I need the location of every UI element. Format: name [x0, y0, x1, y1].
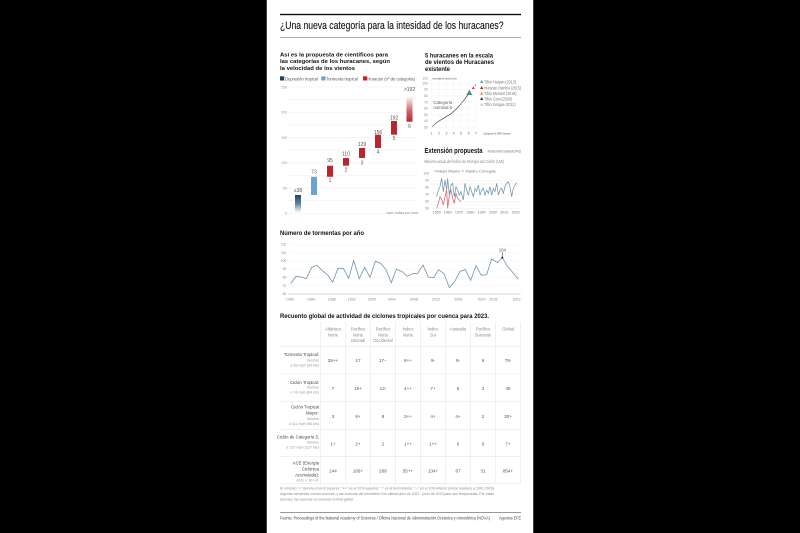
row labels: Ciclónica: [302, 466, 320, 472]
LMI line chart: Mejor Rastro: [437, 168, 461, 173]
table values: [328, 358, 513, 474]
table values: 0: [482, 442, 485, 446]
LMI line chart: [423, 168, 520, 214]
bar value labels: 6: [408, 124, 411, 130]
row labels: Vientos: [307, 417, 319, 421]
table values: 7+: [505, 442, 511, 446]
table values: 854+: [503, 468, 513, 474]
LMI line chart: 50: [425, 206, 429, 210]
scatter chart: 30: [424, 125, 428, 129]
table values: 3: [482, 386, 485, 391]
storms line chart: 100: [281, 259, 286, 263]
scatter chart: 4: [453, 131, 456, 136]
legend: Tormenta tropical: [326, 76, 358, 82]
scatter chart: Categoría: [433, 100, 453, 105]
scatter chart: 90: [424, 88, 428, 92]
scatter chart: 7: [475, 131, 478, 136]
table values: 3++: [404, 414, 412, 419]
scatter chart: 60: [424, 107, 428, 111]
table values: 4++: [404, 386, 412, 391]
row labels: Vientos: [307, 386, 319, 390]
footnote: [280, 486, 495, 502]
title: ¿Una nueva categoría para la intesidad de los huracanes?: [280, 20, 504, 32]
table values: 1+: [330, 442, 336, 446]
bars: [295, 96, 412, 212]
table values: 2+: [355, 442, 361, 446]
storms line chart: 70: [283, 284, 286, 288]
LMI line chart: 1970: [455, 210, 463, 214]
heading: proposed extension: Extensión propuesta: [424, 146, 483, 155]
basin note: Pacífico Norte Occidental (1PNC): [488, 150, 521, 154]
scatter chart: 2: [438, 131, 441, 136]
footnote: Algunas tormentas cruzan cuencas, y las cuencas del hemisferio Sur utilizan julio de 2022 - junio de 2023 para sus temporadas. Por estas: [280, 491, 494, 496]
row labels: ≥ 39 mph (34 kts): [290, 363, 319, 367]
column headers: Atlántico: [325, 326, 342, 332]
bar value labels: 95: [327, 158, 333, 164]
bar value labels: 3: [361, 160, 364, 166]
bar value labels: 73: [311, 170, 317, 176]
table values: 166+: [353, 468, 363, 474]
row labels: Vientos: [307, 440, 319, 444]
legend: [280, 76, 415, 82]
table values: 28++: [328, 358, 339, 363]
storms line chart: 1980: [286, 297, 294, 301]
scatter chart: 5: [460, 131, 463, 136]
table values: 7: [332, 386, 335, 391]
table values: 31: [480, 468, 486, 474]
column headers: Suroeste: [475, 332, 492, 337]
table values: 17: [355, 358, 361, 363]
scatter chart: nominal 5: [433, 105, 453, 110]
storms line chart: 1984: [307, 297, 315, 301]
column headers: Norte: [328, 332, 339, 337]
storms line chart: 2008: [454, 297, 462, 301]
legend: Depresión tropical: [285, 76, 318, 82]
LMI line chart: 1990: [478, 210, 486, 214]
hurricane legend: Tifón Haiyan (2013): [484, 79, 516, 84]
scatter chart: 50: [424, 113, 428, 117]
storms line chart: 1988: [328, 297, 336, 301]
storms line chart: 2000: [368, 297, 376, 301]
hurricane legend: Tifón Surigae (2021): [484, 102, 516, 107]
column headers: Occidental: [373, 338, 393, 343]
table values: 55++: [403, 468, 414, 474]
table values: 5: [457, 386, 460, 391]
table values: 6: [482, 358, 485, 363]
row labels: ≥ 74 mph (64 kts): [290, 390, 319, 394]
footer: source and credit: [280, 512, 521, 521]
table values: 144: [329, 468, 337, 474]
LMI line chart: 2010: [500, 210, 508, 214]
row labels: Tormenta Tropical:: [284, 352, 319, 357]
table values: 134+: [428, 468, 438, 474]
bar value labels: ≤38: [294, 188, 302, 194]
footnote: razones, las cuencas no sumarán el total global.: [280, 496, 354, 502]
y axis labels: 0: [285, 212, 287, 216]
table values: 30+: [504, 414, 512, 419]
y axis labels: [281, 85, 287, 216]
table values: 12-: [380, 386, 387, 391]
bar value labels: 2: [345, 168, 348, 174]
panel: storms per year: [280, 231, 521, 301]
scatter chart: 6: [468, 131, 471, 136]
scatter chart: 70: [424, 100, 428, 104]
row labels: Ciclón Tropical: [291, 404, 319, 410]
storms line chart: 104: [499, 247, 507, 252]
y axis labels: 150: [281, 136, 287, 140]
table values: 17−: [379, 358, 387, 363]
LMI line chart: 2000: [489, 210, 497, 214]
scatter chart: [422, 76, 511, 136]
bar value labels: [294, 87, 415, 194]
panel: proposed extension: [423, 146, 521, 214]
column headers: Índico: [428, 326, 439, 332]
column headers: Sur: [430, 332, 437, 337]
column headers: Pacífico: [376, 326, 391, 332]
table values: 4+: [430, 414, 436, 419]
heading: storms per year: Número de tormentas por año: [280, 231, 364, 237]
row labels: ACE × 10⁴ kt²: [296, 478, 320, 482]
footer: source and credit: Agencia EFE: [499, 516, 521, 521]
table values: 8+: [355, 414, 361, 419]
row labels: [277, 352, 320, 482]
table values: 268: [379, 468, 387, 474]
table values: 1++: [404, 442, 412, 446]
scatter chart: 110: [423, 76, 428, 80]
column headers: Norte: [378, 332, 389, 337]
LMI line chart: 90: [425, 178, 429, 182]
units note: mph: millas por hora: [386, 210, 419, 215]
footer: source and credit: Fuente: Proceedings of the National Academy of Sciences / Oficina Nacional de Administración Oceánica y Atmosférica (NOAA): [280, 516, 490, 521]
table values: 3: [332, 414, 335, 419]
table values: 9-: [431, 358, 436, 363]
storms line chart: 60: [283, 292, 286, 296]
column headers: Índico: [403, 326, 414, 332]
column headers: Norte: [403, 332, 414, 337]
y axis labels: 50: [283, 186, 287, 190]
column headers: Pacífico: [351, 326, 366, 332]
column headers: [325, 326, 514, 343]
table values: 9-: [456, 358, 461, 363]
LMI line chart: Rastro Corregido: [466, 168, 497, 173]
table values: 8++: [404, 358, 412, 363]
row labels: ≥ 157 mph (137 kts): [286, 446, 319, 450]
heading: proposal: Así es la propuesta de científicos para: [280, 52, 389, 58]
row labels: Ciclón Tropical:: [290, 380, 319, 385]
row labels: ≥ 111 mph (96 kts): [289, 422, 319, 426]
storms line chart: 2004: [388, 297, 396, 301]
y axis labels: 100: [281, 161, 287, 165]
column headers: Pacífico: [476, 326, 491, 332]
bar value labels: 5: [393, 136, 396, 142]
storms line chart: 1992: [348, 297, 356, 301]
storms line chart: 2008: [410, 297, 418, 301]
storms line chart: 110: [281, 251, 286, 255]
storms line chart: [281, 242, 521, 301]
table values: 45: [505, 386, 511, 391]
table values: 4+: [455, 414, 461, 419]
hurricane legend: [480, 79, 521, 107]
panel: wind speed categories: [280, 52, 419, 216]
scatter chart: 1: [431, 131, 434, 136]
bar value labels: 129: [358, 142, 366, 148]
heading: five hurricanes: de vientos de Huracanes: [425, 60, 495, 66]
legend: Huracán (nº de categoría): [368, 76, 415, 82]
bar value labels: >192: [404, 87, 415, 93]
scatter chart: 40: [424, 119, 428, 123]
table values: 0: [457, 442, 460, 446]
scatter chart: 80: [424, 94, 428, 98]
bar value labels: 4: [377, 150, 380, 156]
heading: proposal: la velocidad de los vientos: [280, 66, 355, 72]
hurricane legend: Tifón Goni (2020): [484, 96, 512, 101]
table values: 19+: [354, 386, 362, 391]
y axis labels: 250: [281, 85, 287, 89]
table values: 2: [482, 414, 485, 419]
LMI line chart: 60: [425, 199, 429, 203]
footnote: El símbolo "+" denota el tercil superior; "++" es el 10% superior; "-" es el tercil inferior; "--" es el 10% inferior (todos relativos a 1991-2020).: [280, 486, 495, 490]
row labels: Vientos: [307, 358, 319, 362]
panel: five hurricanes: [422, 54, 521, 136]
row labels: Mayor:: [306, 410, 319, 416]
LMI line chart: 1960: [444, 210, 452, 214]
row labels: Acumulada):: [295, 472, 319, 478]
storms line chart: 90: [283, 267, 286, 271]
storms line chart: 120: [281, 242, 286, 246]
panel: global cyclone table: [277, 314, 520, 502]
hurricane legend: Tifón Meranti (2016): [484, 91, 517, 96]
column headers: Australia: [450, 326, 467, 332]
scatter chart: 3: [445, 131, 448, 136]
heading: five hurricanes: existente: [425, 67, 451, 73]
scatter chart: 100: [422, 81, 428, 85]
column headers: Global: [502, 326, 514, 332]
heading: five hurricanes: [425, 54, 495, 73]
row labels: Ciclón de Categoría 5:: [277, 434, 319, 440]
LMI line chart: 1950: [433, 210, 441, 214]
heading: five hurricanes: 5 huracanes en la escala: [425, 54, 494, 60]
scatter chart: Categoría de SMR-Simpson: [483, 132, 511, 136]
LMI line chart: 2020: [512, 210, 520, 214]
table values: 78-: [505, 358, 512, 363]
LMI line chart: 100: [423, 171, 429, 175]
table values: 7+: [430, 386, 436, 391]
table values: 67: [455, 468, 461, 474]
table grid: [280, 322, 520, 484]
LMI line chart: 1980: [466, 210, 474, 214]
LMI line chart: 80: [425, 185, 429, 189]
table values: 8: [382, 414, 385, 419]
storms line chart: 2012: [432, 297, 440, 301]
bar value labels: 192: [390, 116, 398, 122]
bar value labels: 156: [374, 130, 382, 136]
heading: table: Recuento global de actividad de ciclones tropicales por cuenca para 2023.: [280, 314, 489, 320]
storms line chart: 80: [283, 275, 286, 279]
storms line chart: 2018: [489, 297, 497, 301]
table values: 1++: [429, 442, 437, 446]
column headers: Oriental: [351, 338, 365, 343]
row labels: ACE (Energía: [293, 460, 320, 466]
bar value labels: 1: [329, 178, 332, 184]
heading: proposal: las categorías de los huracanes, según: [280, 59, 391, 65]
storms line chart: 2014: [478, 297, 486, 301]
LMI line chart: 70: [425, 192, 429, 196]
heading: proposal: [280, 52, 391, 72]
y axis labels: 200: [281, 111, 287, 115]
subtitle: Máximo anual del Índice de Energía del Ciclón (LMI).: [424, 158, 505, 164]
column headers: Norte: [353, 332, 364, 337]
grid lines: [287, 87, 416, 213]
scatter chart: Intensidad de vientos (m/s): [432, 76, 457, 80]
storms line chart: 2022: [513, 297, 521, 301]
bar value labels: 110: [342, 152, 350, 158]
table values: 2: [382, 442, 385, 446]
hurricane legend: Huracán Patricia (2015): [484, 85, 521, 90]
